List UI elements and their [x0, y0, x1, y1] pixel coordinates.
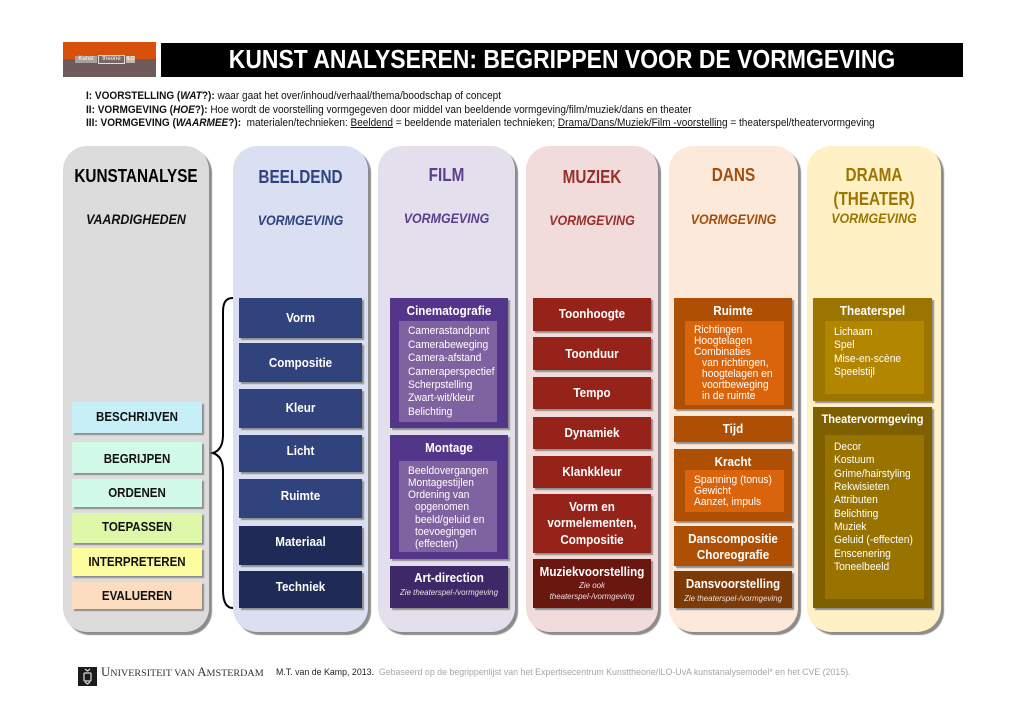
panel: drama [807, 146, 941, 632]
item: materiaal [239, 526, 362, 565]
list: cinematografie: Zwart-wit/kleur [408, 392, 475, 404]
skill: interpreteren: INTERPRETEREN [88, 554, 186, 569]
list: montage: toevoegingen [415, 526, 476, 538]
box: montage: Montage [425, 441, 473, 455]
item: danscompositie, choreografie [674, 526, 792, 566]
box: theaterspel: Theaterspel [840, 304, 905, 318]
item: materiaal: Materiaal [275, 535, 326, 549]
item: vorm: Vorm [286, 311, 315, 325]
list: montage: Montagestijlen [408, 477, 474, 489]
box: cinematografie: Cinematografie [407, 304, 491, 318]
list: theatervormgeving: Grime/hairstyling [834, 468, 911, 480]
subheading: vormgeving: VORMGEVING [258, 213, 343, 228]
item: toonhoogte [533, 298, 651, 331]
list: theatervormgeving: Toneelbeeld [834, 561, 889, 573]
list: theaterspel [825, 321, 924, 394]
box: montage [390, 435, 508, 559]
footer credit: M.T. van de Kamp, 2013. Gebaseerd op de begrippenlijst van het Expertisecentrum Kunsttheorie/ILO-UvA kunstanalysemodel* en het CVE (2015). [276, 666, 851, 677]
brace connecting skills to vormgeving [210, 297, 233, 609]
panel: kunstanalyse [63, 146, 209, 632]
subheading: vaardigheden: VAARDIGHEDEN [86, 212, 186, 227]
item: toonduur [533, 337, 651, 370]
item: toonhoogte: Toonhoogte [559, 307, 625, 321]
subheading: vormgeving: VORMGEVING [831, 211, 917, 226]
subheading: vormgeving: VORMGEVING [691, 212, 776, 227]
intro text block: III: VORMGEVING (WAARMEE?): materialen/technieken: Beeldend = beeldende materialen technieken; Drama/Dans/Muziek/Film -voorstelling = theaterspel/theatervormgeving [86, 117, 875, 129]
list: theatervormgeving: Decor [834, 441, 861, 453]
list: theatervormgeving [825, 435, 924, 599]
box: theatervormgeving: Theatervormgeving [822, 412, 923, 426]
panel: beeldend [233, 146, 368, 632]
subheading: vormgeving: VORMGEVING [404, 211, 489, 226]
list: cinematografie: Camerastandpunt [408, 325, 489, 337]
item: kleur: Kleur [286, 401, 315, 415]
list: theatervormgeving: Muziek [834, 521, 866, 533]
list: theaterspel: Spel [834, 339, 854, 351]
item: ruimte [239, 479, 362, 518]
university name: UNIVERSITEIT VAN AMSTERDAM [101, 665, 264, 679]
heading: muziek: MUZIEK [563, 167, 621, 187]
box: art-direction [390, 566, 508, 608]
skill: ordenen [72, 479, 202, 507]
list: ruimte [685, 321, 784, 405]
list: cinematografie: Cameraperspectief [408, 366, 494, 378]
list: theaterspel: Mise-en-scène [834, 353, 901, 365]
box: theaterspel [813, 298, 932, 401]
intro text block [86, 90, 875, 129]
box: ruimte [674, 298, 792, 409]
skill: beschrijven [72, 402, 202, 433]
logo: Kunsttheorie ILO: Kunst [78, 56, 94, 62]
panel: drama: (THEATER) [833, 189, 915, 209]
list: cinematografie: Camerabeweging [408, 339, 488, 351]
item: tijd [674, 416, 792, 442]
item: vorm en vormelementen, compositie: Vorm en [569, 500, 615, 514]
item: licht [239, 435, 362, 472]
box: ruimte: Ruimte [713, 304, 753, 318]
skill: beschrijven: BESCHRIJVEN [96, 409, 178, 424]
box: theatervormgeving [813, 407, 932, 608]
item: techniek [239, 571, 362, 608]
skill: toepassen: TOEPASSEN [102, 519, 172, 534]
item: vorm en vormelementen, compositie [533, 494, 651, 553]
item: tempo: Tempo [573, 386, 611, 400]
panel: muziek [526, 146, 658, 632]
list: theatervormgeving: Attributen [834, 494, 878, 506]
heading: beeldend: BEELDEND [258, 167, 343, 187]
item: compositie [239, 343, 362, 382]
list: ruimte: Combinaties [694, 346, 751, 358]
list: montage [399, 461, 497, 552]
list: kracht: Gewicht [694, 485, 731, 497]
heading: drama (theater) [833, 165, 915, 209]
item: muziekvoorstelling: theaterspel-/vormgeving [550, 591, 634, 601]
list: theatervormgeving: Geluid (-effecten) [834, 534, 913, 546]
item: tijd: Tijd [723, 422, 743, 436]
list: cinematografie [399, 321, 497, 422]
list: montage: Ordening van [408, 489, 469, 501]
item: danscompositie, choreografie: Choreografie [697, 548, 769, 562]
panel: film [378, 146, 515, 632]
item: tempo [533, 377, 651, 409]
item: muziekvoorstelling [533, 559, 651, 608]
skill: begrijpen: BEGRIJPEN [104, 451, 170, 466]
list: ruimte: Richtingen [694, 324, 742, 336]
logo: Kunsttheorie ILO [63, 42, 156, 77]
heading: kunstanalyse: KUNSTANALYSE [74, 166, 198, 186]
list: cinematografie: Belichting [408, 406, 452, 418]
item: techniek: Techniek [276, 580, 325, 594]
item: dynamiek: Dynamiek [565, 426, 619, 440]
list: theaterspel: Speelstijl [834, 366, 875, 378]
item: dansvoorstelling [674, 571, 792, 608]
box: kracht: Kracht [715, 455, 751, 469]
item: muziekvoorstelling: Muziekvoorstelling [540, 565, 644, 579]
item: kleur [239, 389, 362, 428]
list: ruimte: Hoogtelagen [694, 335, 752, 347]
list: theatervormgeving: Enscenering [834, 548, 891, 560]
skill: evalueren [72, 582, 202, 609]
box: cinematografie [390, 298, 508, 428]
box: art-direction: Zie theaterspel-/vormgeving [400, 587, 498, 597]
item: ruimte: Ruimte [281, 489, 320, 503]
list: theatervormgeving: Kostuum [834, 454, 874, 466]
list: ruimte: hoogtelagen en [702, 368, 773, 380]
item: toonduur: Toonduur [565, 347, 619, 361]
subheading: vormgeving: VORMGEVING [549, 213, 635, 228]
skill: begrijpen [72, 442, 202, 473]
item: vorm en vormelementen, compositie: vormelementen, [547, 516, 637, 530]
item: dansvoorstelling: Dansvoorstelling [686, 577, 780, 591]
heading: dans: DANS [712, 165, 755, 185]
skill: ordenen: ORDENEN [108, 485, 166, 500]
title bar: KUNST ANALYSEREN: BEGRIPPEN VOOR DE VORMGEVING [229, 46, 895, 74]
skill: toepassen [72, 513, 202, 543]
item: vorm [239, 298, 362, 338]
list: montage: beeld/geluid en [415, 514, 484, 526]
list: kracht: Spanning (tonus) [694, 474, 772, 486]
list: montage: opgenomen [415, 501, 469, 513]
list: kracht: Aanzet, impuls [694, 496, 761, 508]
box: art-direction: Art-direction [414, 571, 484, 585]
logo: Kunsttheorie ILO: theorie [102, 56, 121, 62]
list: montage: (effecten) [415, 538, 458, 550]
list: ruimte: van richtingen, [702, 357, 769, 369]
heading: drama (theater): DRAMA [846, 165, 902, 185]
list: theatervormgeving: Belichting [834, 508, 878, 520]
intro text block: II: VORMGEVING (HOE?): Hoe wordt de voorstelling vormgegeven door middel van beeldende vormgeving/film/muziek/dans en theater [86, 104, 692, 116]
item: muziekvoorstelling: Zie ook [579, 580, 605, 590]
list: cinematografie: Scherpstelling [408, 379, 472, 391]
item: compositie: Compositie [269, 356, 332, 370]
skill: interpreteren [72, 548, 202, 576]
list: montage: Beeldovergangen [408, 465, 488, 477]
title bar [161, 43, 963, 77]
item: dansvoorstelling: Zie theaterspel-/vormgeving [684, 593, 782, 603]
skill: evalueren: EVALUEREN [102, 588, 172, 603]
heading: film: FILM [429, 165, 464, 185]
list: cinematografie: Camera-afstand [408, 352, 481, 364]
item: licht: Licht [287, 444, 314, 458]
item: danscompositie, choreografie: Danscompositie [688, 532, 778, 546]
list: ruimte: voortbeweging [702, 379, 769, 391]
item: vorm en vormelementen, compositie: Compositie [560, 533, 624, 547]
icon: UvA logo [78, 667, 97, 686]
item: klankkleur: Klankkleur [562, 465, 622, 479]
item: klankkleur [533, 456, 651, 488]
list: kracht [685, 470, 784, 512]
list: theaterspel: Lichaam [834, 326, 873, 338]
item: dynamiek [533, 417, 651, 449]
panel: dans [669, 146, 798, 632]
list: ruimte: in de ruimte [702, 390, 755, 402]
intro text block: I: VOORSTELLING (WAT?): waar gaat het over/inhoud/verhaal/thema/boodschap of concept [86, 90, 501, 102]
box: kracht [674, 449, 792, 521]
list: theatervormgeving: Rekwisieten [834, 481, 889, 493]
logo: Kunsttheorie ILO: ILO [126, 56, 135, 62]
